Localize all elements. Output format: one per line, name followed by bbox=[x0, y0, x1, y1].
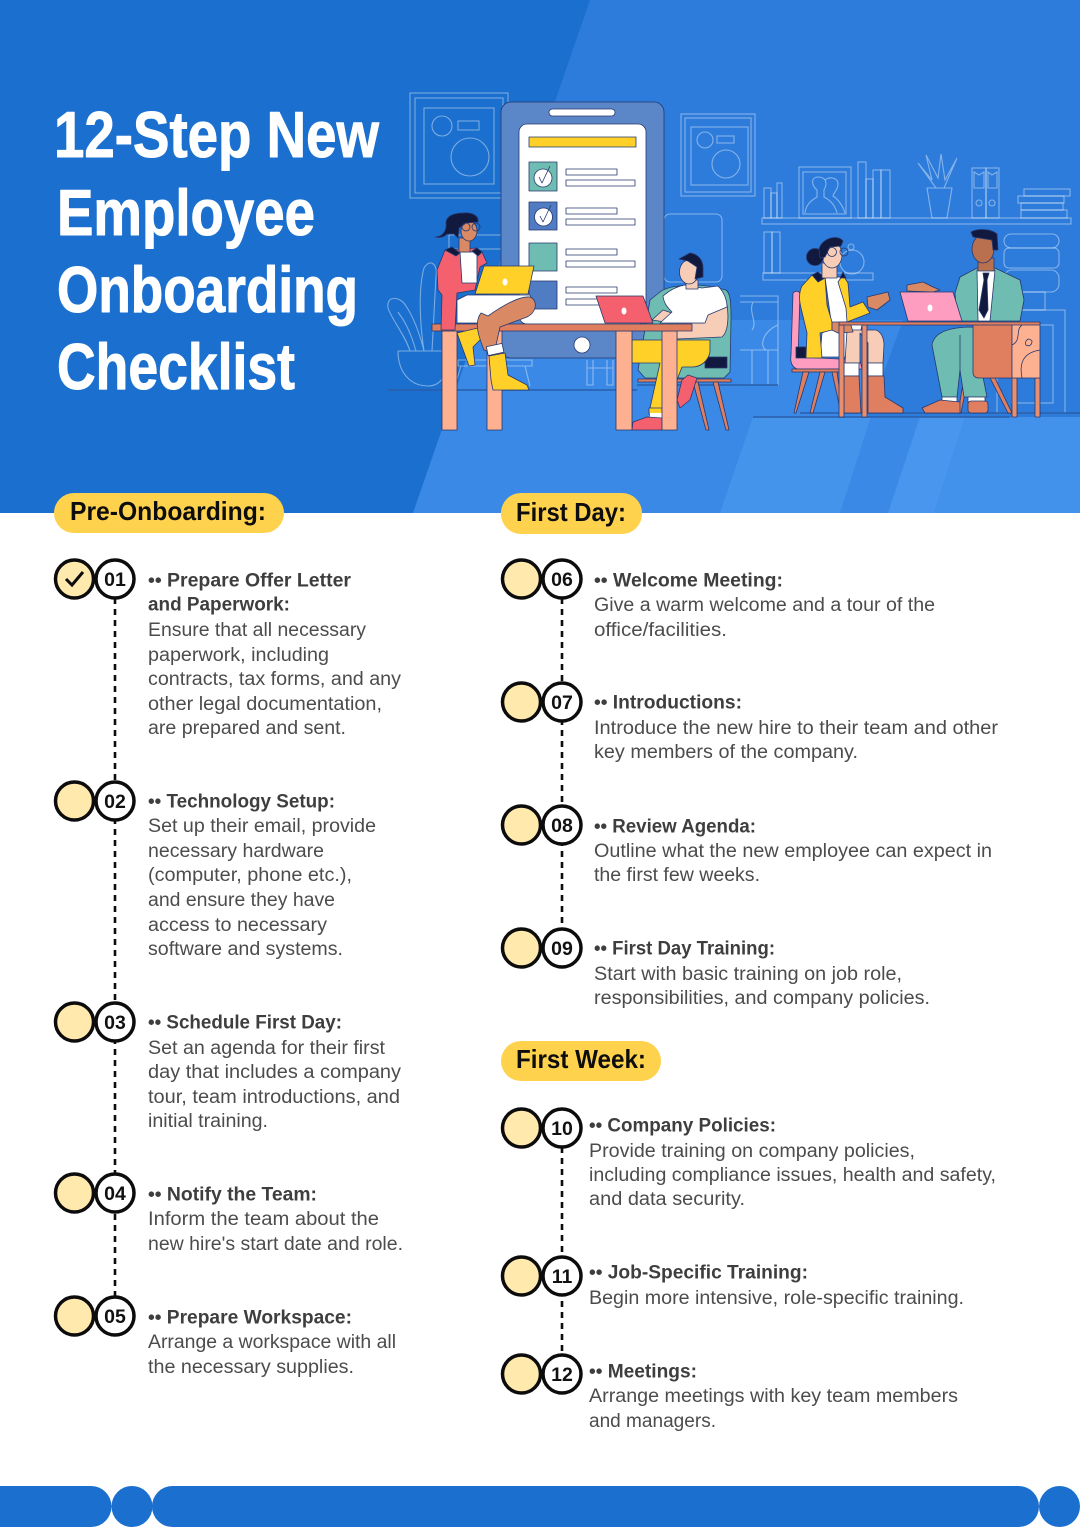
step 01: are prepared and sent. bbox=[148, 718, 346, 739]
section pill: First Day: First Day: bbox=[516, 497, 626, 527]
step 01 bbox=[56, 560, 402, 739]
step 09: Start with basic training on job role, bbox=[594, 964, 902, 985]
step 08: •• Review Agenda: bbox=[594, 816, 756, 838]
step 02: software and systems. bbox=[148, 939, 343, 960]
title: 12-Step New bbox=[54, 98, 379, 171]
step 05: •• Prepare Workspace: bbox=[148, 1308, 352, 1328]
step 04: new hire's start date and role. bbox=[148, 1234, 403, 1255]
step 06 bbox=[502, 560, 935, 641]
step 09: 09 bbox=[551, 938, 573, 960]
step 02: (computer, phone etc.), bbox=[148, 865, 352, 886]
step 03: initial training. bbox=[148, 1111, 268, 1132]
step 02 bbox=[56, 782, 376, 960]
section pill: Pre-Onboarding: Pre-Onboarding: bbox=[70, 496, 266, 526]
step 07 bbox=[502, 683, 999, 763]
step 03: day that includes a company bbox=[148, 1062, 402, 1083]
step 01: paperwork, including bbox=[148, 645, 329, 666]
step 01: other legal documentation, bbox=[148, 694, 382, 715]
step 10: and data security. bbox=[589, 1189, 745, 1210]
section pill: First Day bbox=[501, 493, 642, 534]
illustration: woman in yellow coat on pink chair bbox=[791, 238, 903, 413]
timeline: first day dashed line bbox=[561, 598, 563, 929]
step 06: Give a warm welcome and a tour of the bbox=[594, 595, 935, 616]
timeline: first week dashed line bbox=[561, 1147, 563, 1355]
title bbox=[54, 98, 379, 403]
step 10: Provide training on company policies, bbox=[589, 1141, 915, 1162]
step 03: tour, team introductions, and bbox=[148, 1087, 400, 1108]
step 09 bbox=[502, 929, 930, 1009]
step 08: 08 bbox=[551, 815, 573, 837]
step 02: access to necessary bbox=[148, 915, 328, 936]
title: Employee bbox=[57, 176, 315, 249]
footer band bbox=[0, 1486, 1080, 1527]
step 02: Set up their email, provide bbox=[148, 816, 376, 837]
step 02: 02 bbox=[104, 791, 126, 813]
step 12: •• Meetings: bbox=[589, 1362, 697, 1382]
step 01: •• Prepare Offer Letter bbox=[148, 570, 352, 592]
step 08: Outline what the new employee can expect in bbox=[594, 841, 992, 862]
icon: checked box bbox=[56, 560, 94, 598]
step 01: and Paperwork: bbox=[148, 594, 290, 616]
step 12: and managers. bbox=[589, 1411, 716, 1432]
step 02: and ensure they have bbox=[148, 890, 335, 911]
step 09: •• First Day Training: bbox=[594, 938, 775, 960]
step 09: responsibilities, and company policies. bbox=[594, 988, 930, 1009]
step 02: •• Technology Setup: bbox=[148, 792, 335, 812]
illustration: desk and pink laptop bbox=[839, 292, 1040, 417]
step 01: Ensure that all necessary bbox=[148, 620, 366, 641]
step 01: contracts, tax forms, and any bbox=[148, 669, 402, 690]
step 07: Introduce the new hire to their team and other bbox=[594, 718, 999, 739]
illustration: table and red laptop bbox=[432, 296, 692, 430]
illustration: giant phone checklist bbox=[501, 102, 664, 358]
step 06: •• Welcome Meeting: bbox=[594, 570, 783, 592]
timeline: pre-onboarding dashed line bbox=[114, 598, 116, 1297]
step 03: 03 bbox=[104, 1012, 126, 1034]
office background line art bbox=[388, 93, 1071, 413]
step 01: 01 bbox=[104, 569, 126, 591]
section pill: Pre-Onboarding bbox=[54, 493, 284, 533]
step 07: 07 bbox=[551, 692, 573, 714]
step 12: 12 bbox=[551, 1364, 573, 1386]
step 07: key members of the company. bbox=[594, 742, 858, 763]
step 10: 10 bbox=[551, 1118, 573, 1140]
illustration: seated person at right of table bbox=[632, 253, 731, 430]
step 11: Begin more intensive, role-specific training. bbox=[589, 1288, 964, 1309]
step 07: •• Introductions: bbox=[594, 692, 742, 714]
step 03 bbox=[56, 1003, 402, 1132]
step 11 bbox=[502, 1257, 964, 1309]
illustration: man in teal suit bbox=[907, 230, 1024, 413]
step 08 bbox=[502, 806, 992, 886]
step 10: •• Company Policies: bbox=[589, 1116, 776, 1136]
step 10 bbox=[502, 1109, 996, 1210]
section pill: First Week bbox=[501, 1041, 661, 1081]
step 08: the first few weeks. bbox=[594, 865, 760, 886]
step 02: necessary hardware bbox=[148, 841, 324, 862]
section pill: First Week: First Week: bbox=[516, 1044, 646, 1074]
step 04: 04 bbox=[104, 1183, 126, 1205]
step 04 bbox=[56, 1174, 403, 1255]
step 06: 06 bbox=[551, 569, 573, 591]
step 03: •• Schedule First Day: bbox=[148, 1012, 342, 1034]
step 05: Arrange a workspace with all bbox=[148, 1332, 396, 1353]
step 12 bbox=[502, 1355, 958, 1432]
step 11: •• Job-Specific Training: bbox=[589, 1262, 808, 1284]
step 12: Arrange meetings with key team members bbox=[589, 1386, 958, 1407]
step 05 bbox=[56, 1297, 396, 1378]
step 05: the necessary supplies. bbox=[148, 1357, 354, 1378]
step 06: office/facilities. bbox=[594, 620, 727, 641]
step 03: Set an agenda for their first bbox=[148, 1038, 386, 1059]
illustration: woman sitting on table bbox=[435, 213, 535, 390]
step 11: 11 bbox=[552, 1266, 572, 1288]
header background bbox=[0, 0, 1080, 513]
title: Checklist bbox=[57, 330, 295, 403]
floor lines bbox=[388, 385, 1080, 417]
step 04: Inform the team about the bbox=[148, 1209, 379, 1230]
step 10: including compliance issues, health and safety, bbox=[589, 1165, 996, 1186]
title: Onboarding bbox=[57, 253, 358, 326]
step 05: 05 bbox=[104, 1306, 126, 1328]
step 04: •• Notify the Team: bbox=[148, 1184, 317, 1206]
